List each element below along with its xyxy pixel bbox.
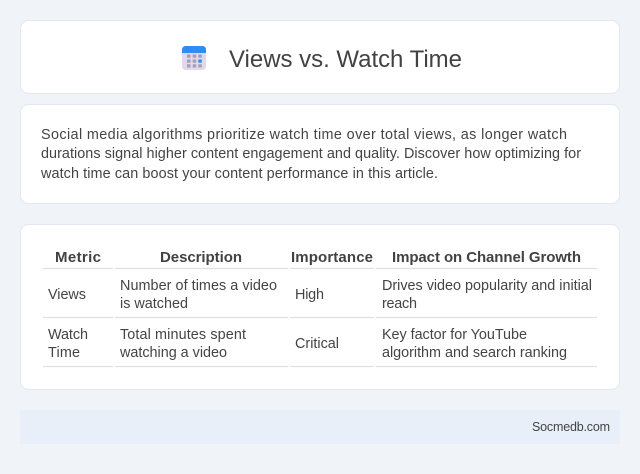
table row: views: Drives video popularity and initial [382,278,592,294]
panel: comparison table [20,224,620,390]
title: Views vs. Watch Time [229,46,462,73]
table row: watch time: Critical [295,336,339,352]
table row: views: Views [48,287,86,303]
table row: watch time: algorithm and search ranking [382,345,567,361]
table header: Impact on Channel Growth [392,249,581,266]
intro text: durations signal higher content engagement and quality. Discover how optimizing for [41,146,581,162]
table header: Importance [291,249,373,266]
table row: views: Number of times a video [120,278,277,294]
table row: watch time: watching a video [119,345,227,361]
table rules [43,268,597,366]
table row: watch time: Watch [48,327,88,343]
icon: calendar [182,46,206,70]
table row: watch time [48,327,567,361]
table row: views [48,278,592,312]
intro text: watch time can boost your content performance in this article. [40,166,438,182]
table header [55,249,581,266]
panel: introduction [20,104,620,204]
table row: watch time: Time [48,345,80,361]
intro text [40,127,581,182]
table row: watch time: Total minutes spent [120,327,246,343]
table header: Metric [55,249,101,266]
footer source text: Socmedb.com [532,420,610,434]
table row: views: is watched [120,296,188,312]
panel: footer [20,410,620,444]
intro text: Social media algorithms prioritize watch time over total views, as longer watch [41,127,567,143]
table row: watch time: Key factor for YouTube [382,327,527,343]
table header: Description [160,249,242,266]
panel: header [20,20,620,94]
table row: views: reach [382,296,417,312]
table row: views: High [295,287,324,303]
